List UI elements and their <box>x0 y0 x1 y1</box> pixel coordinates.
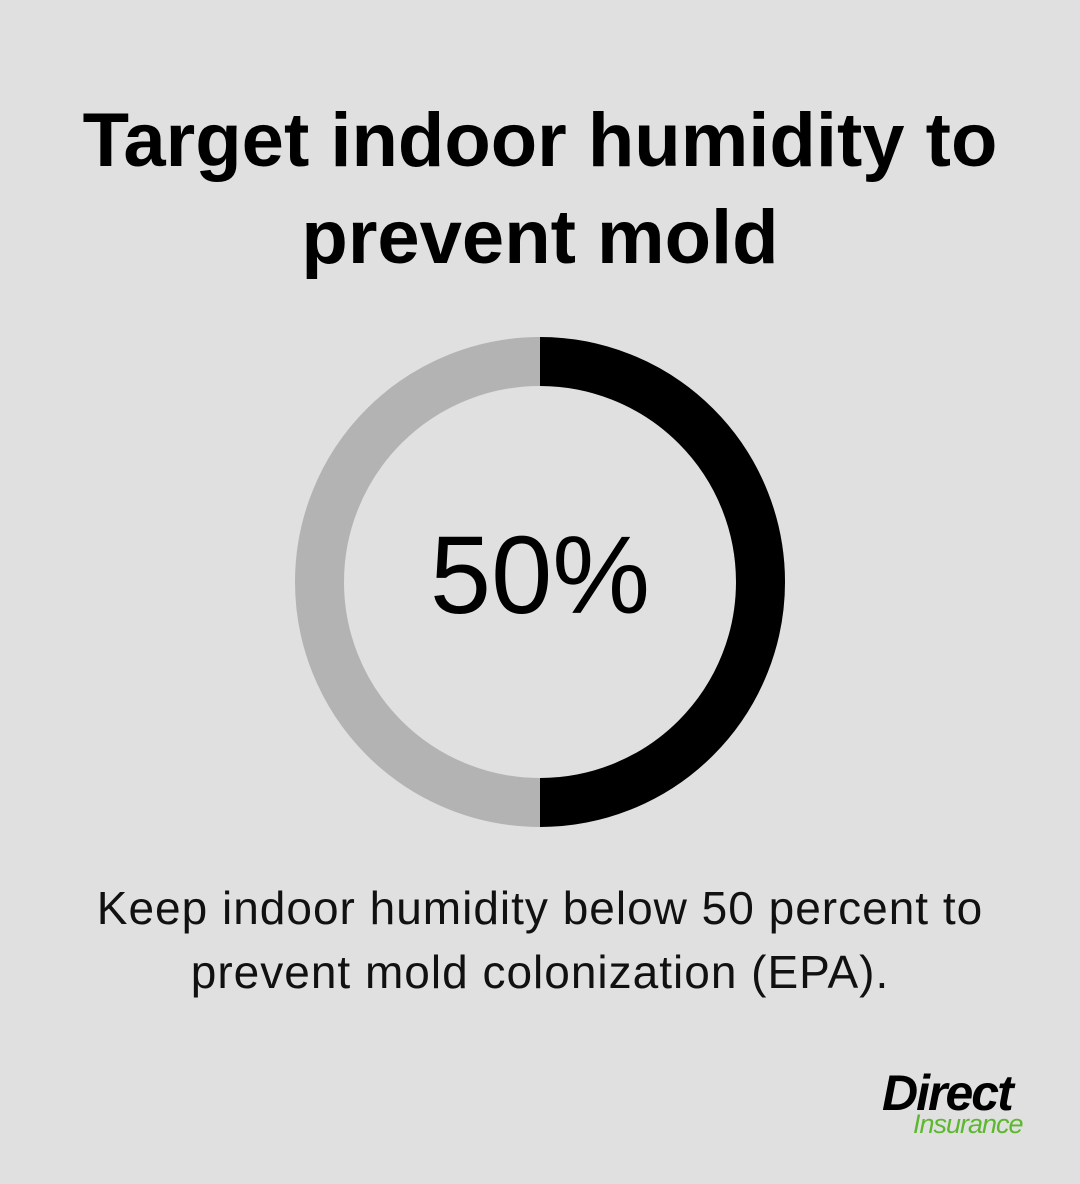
title: prevent mold <box>301 195 779 280</box>
center value: 50% <box>430 514 650 637</box>
logo: Insurance <box>913 1109 1023 1139</box>
logo <box>882 1065 1023 1139</box>
body text: Keep indoor humidity below 50 percent to <box>97 882 983 934</box>
logo: Direct <box>882 1065 1012 1121</box>
body text <box>97 882 983 998</box>
title: Target indoor humidity to <box>83 98 997 183</box>
ring value 50% <box>540 362 760 802</box>
body text: prevent mold colonization (EPA). <box>191 946 889 998</box>
title <box>83 98 997 280</box>
ring background <box>320 362 760 802</box>
